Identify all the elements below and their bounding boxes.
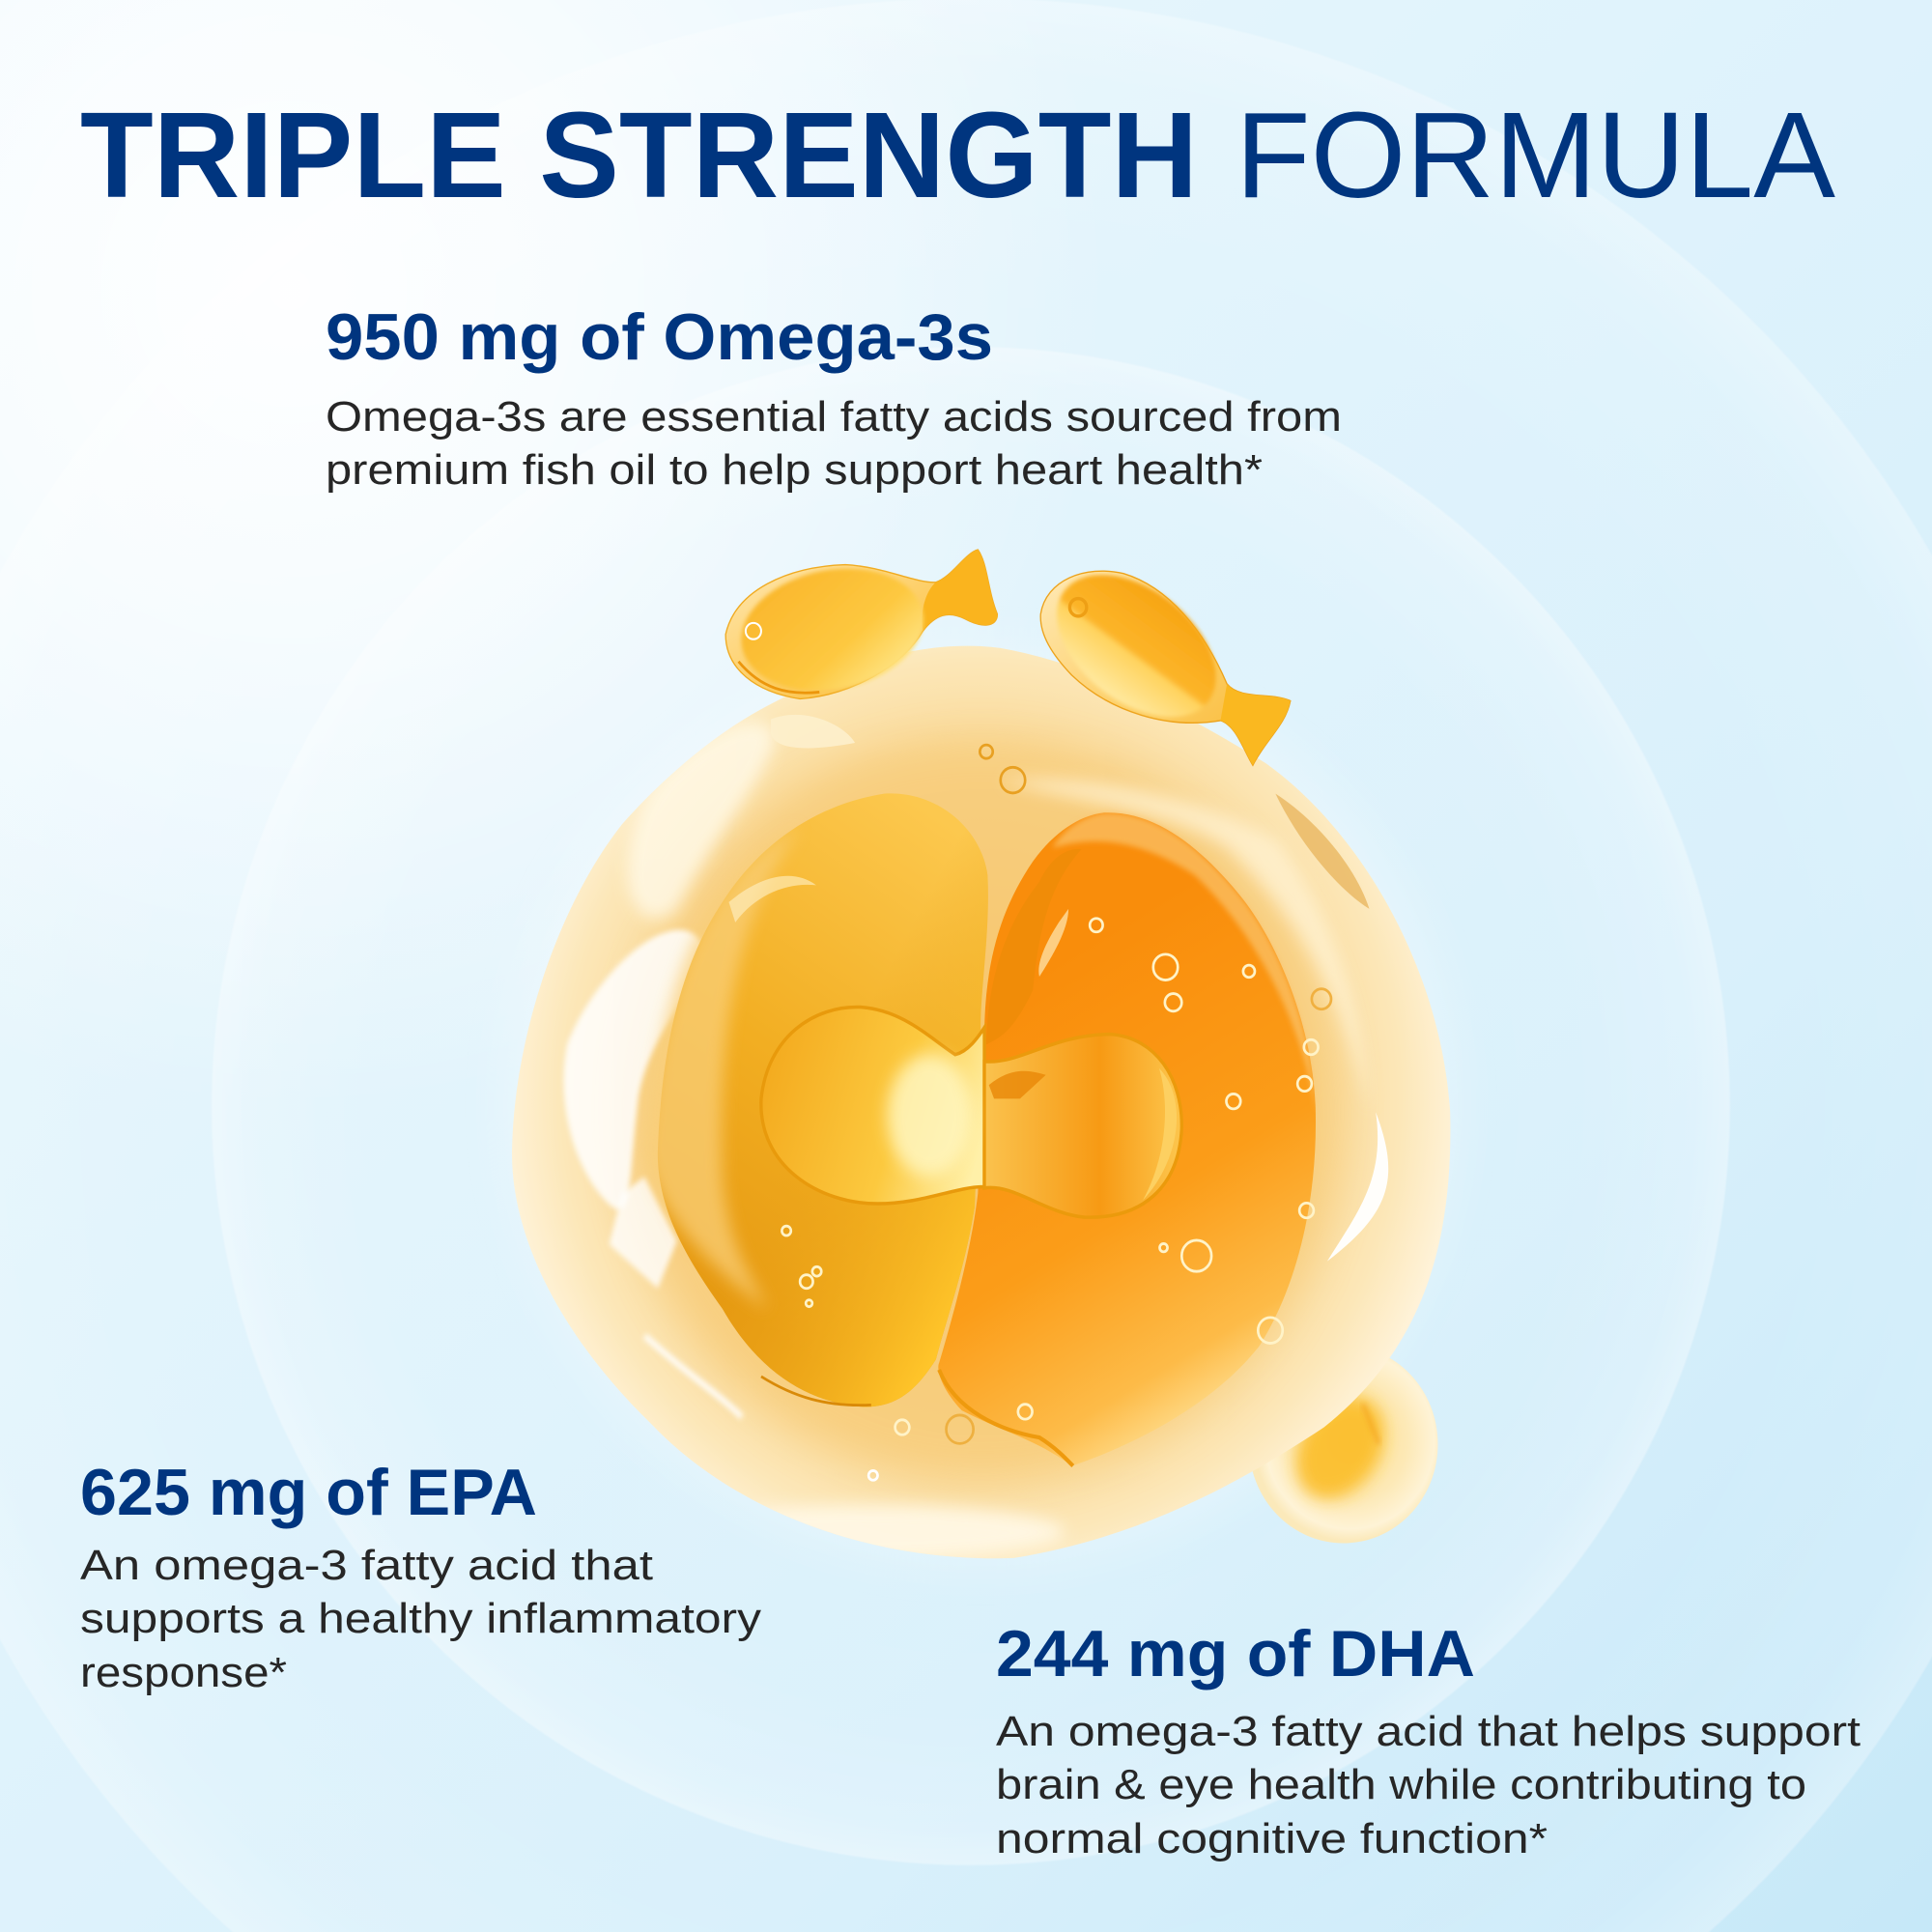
text: EPA description xyxy=(80,1542,761,1696)
soft glow xyxy=(473,614,1489,1597)
title xyxy=(80,87,1835,223)
right oil lobe xyxy=(938,812,1316,1466)
title: FORMULA xyxy=(1236,87,1835,223)
fish capsule right xyxy=(1032,546,1291,765)
icon: small droplet xyxy=(1249,1346,1437,1544)
left oil lobe xyxy=(644,793,988,1407)
heading: omega-3: 950 mg of Omega-3s xyxy=(326,300,993,374)
text: EPA description: response* xyxy=(80,1649,287,1696)
outer oil blob xyxy=(512,646,1450,1559)
illustration: oil droplet with fish capsules xyxy=(512,549,1451,1559)
text: DHA description: normal cognitive function* xyxy=(996,1815,1548,1862)
oil bubbles xyxy=(781,745,1331,1480)
text: EPA description: An omega-3 fatty acid that xyxy=(80,1542,653,1589)
text: DHA description xyxy=(996,1708,1861,1862)
callout: 950 mg of Omega-3s xyxy=(326,300,1342,494)
text: omega-3 description xyxy=(326,393,1342,494)
text: DHA description: An omega-3 fatty acid that helps support xyxy=(996,1708,1861,1755)
text: omega-3 description: premium fish oil to help support heart health* xyxy=(326,446,1263,494)
heading: DHA: 244 mg of DHA xyxy=(996,1617,1475,1690)
text: DHA description: brain & eye health while contributing to xyxy=(996,1761,1806,1808)
central dumbbell droplet xyxy=(761,1008,1181,1217)
title: TRIPLE STRENGTH xyxy=(80,87,1198,223)
text: omega-3 description: Omega-3s are essential fatty acids sourced from xyxy=(326,393,1342,440)
heading: EPA: 625 mg of EPA xyxy=(80,1456,537,1529)
fish capsule left xyxy=(725,550,997,705)
text: EPA description: supports a healthy inflammatory xyxy=(80,1595,761,1642)
callout: 244 mg of DHA xyxy=(996,1617,1861,1862)
callout: 625 mg of EPA xyxy=(80,1456,761,1696)
